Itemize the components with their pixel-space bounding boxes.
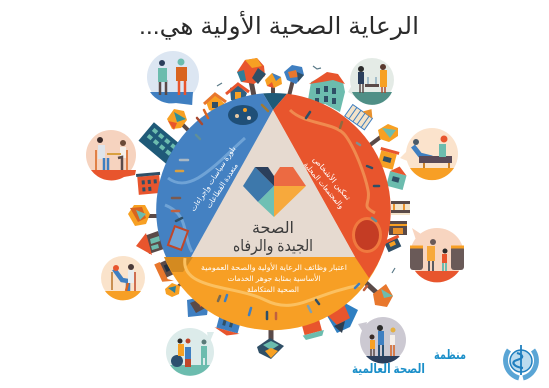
text: orange segment: اعتبار وظائف الرعاية الأولية والصحة العمومية xyxy=(201,262,347,272)
pond: blue xyxy=(228,105,258,125)
tree: lower right xyxy=(365,282,393,307)
house: yellow xyxy=(204,94,226,113)
tree: bottom centre xyxy=(257,325,284,359)
overlap shade xyxy=(164,257,193,272)
text: orange segment: الأساسية بمثابة جوهر الخدمات xyxy=(228,273,320,283)
building: right lower xyxy=(389,221,407,235)
building: upper left dark xyxy=(138,122,182,164)
paths on the sectors xyxy=(168,138,245,183)
building: large teal xyxy=(307,72,345,112)
birds xyxy=(217,66,395,273)
panel: red sector xyxy=(273,94,391,278)
panel: orange segment xyxy=(164,257,381,330)
central circle xyxy=(156,93,391,330)
text: blue sector: متعددة القطاعات xyxy=(204,161,240,210)
house: right orange xyxy=(376,147,400,170)
tree: upper right xyxy=(370,124,398,145)
text: good health: الجيدة والرفاه xyxy=(233,238,313,256)
house: orange roof xyxy=(226,84,249,104)
house: left brick xyxy=(136,172,162,195)
house: right teal xyxy=(386,164,408,190)
text: blue sector: بلورة سياسات وإجراءات xyxy=(188,144,237,213)
logo text: منظمة xyxy=(434,347,466,362)
house: lower right blue xyxy=(326,303,358,333)
building: right brown xyxy=(391,201,410,215)
text: red sector: تمكين الأشخاص xyxy=(311,154,353,202)
logo text xyxy=(352,347,466,376)
text: orange segment xyxy=(201,262,347,294)
panel: centre triangle xyxy=(191,110,355,257)
text: orange segment: الصحية المتكاملة xyxy=(247,285,299,294)
tree: top large xyxy=(237,58,266,96)
bubble: top left xyxy=(147,51,199,105)
icon: WHO emblem xyxy=(506,345,536,378)
house: left dark xyxy=(136,231,164,255)
house: bottom teal xyxy=(213,312,244,339)
bubble: left 1 xyxy=(86,130,136,180)
logo text: الصحة العالمية xyxy=(352,361,425,376)
icon: heart xyxy=(243,167,306,217)
tree: lower left small xyxy=(165,282,183,297)
bubble: bottom left xyxy=(166,328,214,376)
house: lower left blue xyxy=(187,295,210,317)
bubble: right 1 xyxy=(400,128,458,180)
bubble: right 2 xyxy=(410,228,464,282)
trees and houses around the circle xyxy=(128,58,410,359)
people xyxy=(172,105,379,319)
panel: blue sector xyxy=(156,93,273,257)
bubble: bottom right xyxy=(358,317,406,364)
tree: top right xyxy=(284,65,304,96)
house: bottom right xyxy=(299,317,325,341)
house: right lowest xyxy=(382,235,403,253)
title: الرعاية الصحية الأولية هي... xyxy=(139,11,419,40)
text: good health: الصحة xyxy=(252,220,294,237)
pond: red xyxy=(352,217,382,253)
bubble: left 2 xyxy=(101,256,145,300)
text: good health xyxy=(233,220,313,256)
tree: left orange xyxy=(128,205,160,226)
building: fence xyxy=(345,99,376,130)
tree: upper left xyxy=(167,109,192,134)
text: red sector: والمجتمعات المحلية xyxy=(302,160,346,211)
bubble: top right xyxy=(348,58,394,105)
segment: top teal xyxy=(263,93,287,110)
house: left small red xyxy=(154,256,182,285)
window: red frame in blue sector xyxy=(168,226,188,250)
logo: WHO xyxy=(352,345,536,378)
tree: top small xyxy=(265,73,282,98)
